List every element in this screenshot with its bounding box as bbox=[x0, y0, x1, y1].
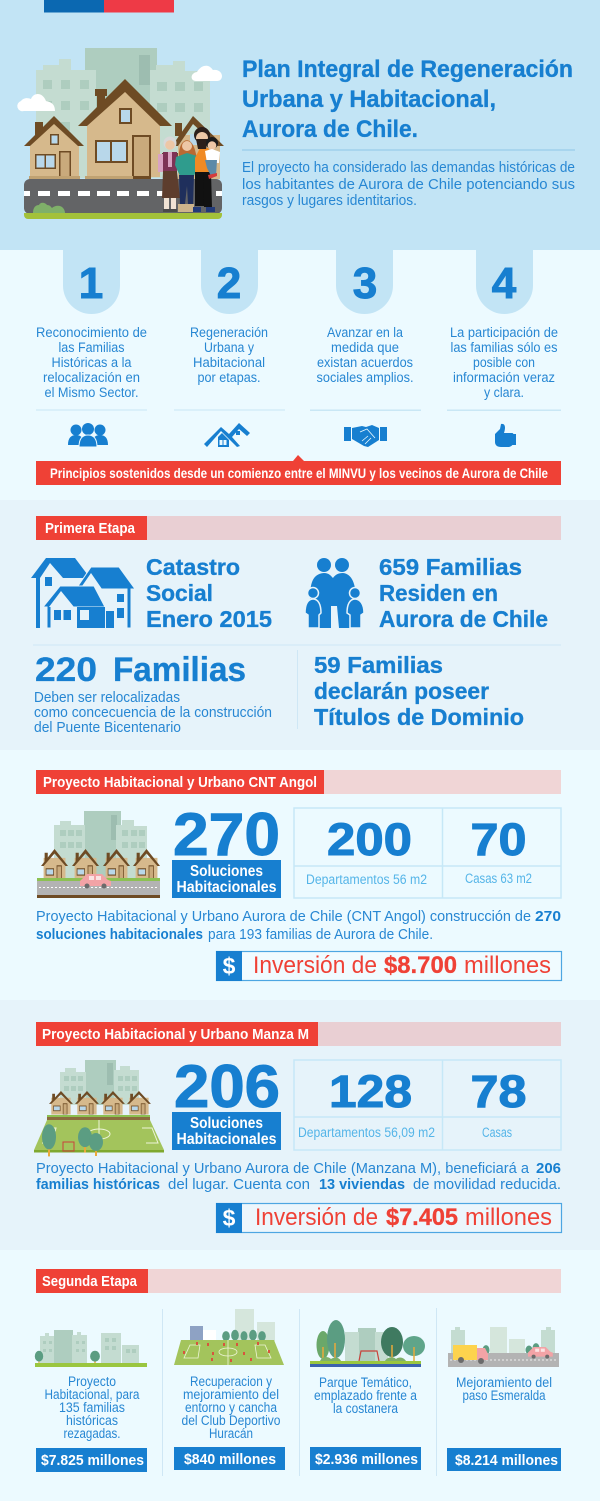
stat: 59 families bbox=[314, 652, 524, 730]
text 4: La participación de bbox=[450, 325, 558, 340]
table: Manza M breakdown: Departamentos 56,09 m2 bbox=[298, 1125, 435, 1140]
illustration: park bbox=[310, 1320, 425, 1367]
table: Manza M breakdown: Casas bbox=[482, 1125, 512, 1140]
illustration: Manza M houses and field bbox=[34, 1060, 164, 1156]
text: CNT Angol description bbox=[36, 909, 561, 943]
text 1: Reconocimiento de bbox=[36, 325, 147, 340]
panel: theme park bbox=[310, 1320, 425, 1470]
text: families residing: Residen en bbox=[379, 580, 498, 606]
text: Proyecto bbox=[68, 1374, 116, 1389]
illustration: neighbourhood with family bbox=[17, 48, 224, 219]
text 1: el Mismo Sector. bbox=[44, 385, 138, 400]
text: families residing: 659 Familias bbox=[379, 554, 522, 580]
text: census: Social bbox=[146, 580, 213, 606]
stat: 206 solutions bbox=[172, 1053, 281, 1150]
heading: Primera Etapa bbox=[36, 516, 561, 540]
text: Parque Temático, bbox=[319, 1375, 412, 1390]
text bbox=[314, 1375, 417, 1416]
text bbox=[44, 1374, 140, 1441]
text 1 bbox=[36, 325, 147, 400]
illustration: CNT Angol houses bbox=[37, 811, 160, 898]
heading: Manza M bbox=[36, 1022, 561, 1046]
heading: Segunda Etapa bbox=[36, 1269, 561, 1293]
panel: Esmeralda passage bbox=[447, 1327, 561, 1471]
text: CNT Angol description: para 193 familias de Aurora de Chile. bbox=[208, 927, 433, 943]
number tab 4 bbox=[476, 250, 533, 314]
text: Manza M description: 206 bbox=[536, 1161, 561, 1177]
stat: 206 solutions: Habitacionales bbox=[176, 1131, 276, 1148]
heading: CNT Angol: Proyecto Habitacional y Urbano CNT Angol bbox=[43, 774, 317, 791]
section: first stage background bbox=[0, 500, 600, 750]
callout: investment 7.405: Inversión de bbox=[255, 1204, 378, 1231]
number tab 1 bbox=[63, 250, 120, 314]
price bbox=[174, 1447, 285, 1470]
icon: houses census bbox=[31, 558, 135, 628]
section: Manza M background bbox=[0, 1000, 600, 1250]
text 3: sociales amplios. bbox=[316, 370, 414, 385]
title: Plan Integral de Regeneración bbox=[242, 56, 573, 83]
intro divider bbox=[242, 150, 575, 151]
section: CNT Angol background bbox=[0, 750, 600, 1000]
stat: 220 families: Familias bbox=[113, 651, 246, 689]
text: Manza M description: 13 viviendas bbox=[319, 1177, 405, 1193]
price: $2.936 millones bbox=[315, 1451, 418, 1468]
table: Manza M breakdown: 128 bbox=[329, 1066, 412, 1117]
heading: Manza M: Proyecto Habitacional y Urbano Manza M bbox=[42, 1026, 309, 1043]
icon: houses bbox=[204, 423, 250, 447]
text: Huracán bbox=[209, 1426, 253, 1441]
text: census: Catastro bbox=[146, 554, 240, 580]
heading: Primera Etapa: Primera Etapa bbox=[45, 520, 136, 537]
text: CNT Angol description: Proyecto Habitacional y Urbano Aurora de Chile (CNT Angol) construcción de bbox=[36, 909, 531, 925]
number tab 1: 1 bbox=[79, 259, 103, 308]
text: paso Esmeralda bbox=[462, 1388, 546, 1403]
price: $7.825 millones bbox=[41, 1452, 144, 1469]
family bbox=[158, 127, 220, 212]
text: CNT Angol description: soluciones habitacionales bbox=[36, 927, 203, 943]
flag stripe bbox=[44, 0, 174, 12]
intro text: El proyecto ha considerado las demandas históricas de bbox=[242, 160, 575, 176]
text 4: y clara. bbox=[484, 385, 524, 400]
price: $840 millones bbox=[184, 1451, 276, 1468]
illustration: football pitch bbox=[174, 1309, 284, 1365]
stat: 270 solutions: Habitacionales bbox=[176, 879, 276, 896]
principle 3 bbox=[310, 250, 421, 447]
text: rezagadas. bbox=[64, 1426, 120, 1441]
stat: 59 families: 59 Familias bbox=[314, 652, 443, 678]
price: $8.214 millones bbox=[455, 1452, 558, 1469]
table: CNT Angol breakdown: 70 bbox=[470, 814, 526, 865]
text 3: medida que bbox=[331, 340, 399, 355]
child bbox=[205, 137, 220, 179]
text 4: posible con bbox=[473, 355, 535, 370]
text: históricas bbox=[66, 1413, 118, 1428]
panel: housing project bbox=[35, 1330, 147, 1472]
text 4 bbox=[450, 325, 558, 400]
heading: Segunda Etapa: Segunda Etapa bbox=[42, 1273, 138, 1290]
table: CNT Angol breakdown: Casas 63 m2 bbox=[465, 871, 532, 886]
callout: investment 8.700: $ bbox=[223, 953, 236, 979]
text 3: existan acuerdos bbox=[317, 355, 413, 370]
illustration: buildings bbox=[35, 1330, 147, 1367]
callout: principles banner bbox=[36, 455, 561, 485]
table: Manza M breakdown bbox=[294, 1060, 561, 1150]
table: CNT Angol breakdown: 200 bbox=[327, 814, 412, 865]
text 2: Habitacional bbox=[193, 355, 265, 370]
table: CNT Angol breakdown bbox=[294, 808, 561, 898]
intro text bbox=[242, 160, 575, 209]
text: census: Enero 2015 bbox=[146, 606, 272, 632]
big house bbox=[78, 79, 172, 179]
text: families residing bbox=[379, 554, 548, 632]
stat: 220 families: 220 bbox=[35, 651, 97, 689]
price bbox=[36, 1448, 147, 1472]
text: Manza M description: de movilidad reducida. bbox=[413, 1177, 561, 1193]
clouds bbox=[17, 66, 222, 111]
text: Recuperacion y bbox=[190, 1374, 272, 1389]
stat: 220 families bbox=[34, 651, 272, 736]
principle 4 bbox=[447, 250, 561, 447]
stat: 270 solutions: 270 bbox=[173, 801, 280, 868]
text: Habitacional, para bbox=[44, 1387, 140, 1402]
text 4: información veraz bbox=[453, 370, 555, 385]
section: second stage background bbox=[0, 1250, 600, 1501]
intro text: rasgos y lugares identitarios. bbox=[242, 193, 417, 209]
callout: investment 7.405 bbox=[216, 1203, 562, 1233]
text: mejoramiento del bbox=[183, 1387, 279, 1402]
stat: 270 solutions: Soluciones bbox=[190, 863, 263, 880]
intro text: los habitantes de Aurora de Chile potenciando sus bbox=[242, 177, 575, 193]
text: entorno y cancha bbox=[185, 1400, 277, 1415]
text 2: Regeneración bbox=[190, 325, 268, 340]
buildings bbox=[36, 48, 210, 178]
text 1: las Familias bbox=[58, 340, 125, 355]
text: Manza M description: familias históricas bbox=[36, 1177, 160, 1193]
heading: CNT Angol bbox=[36, 770, 561, 794]
text: emplazado frente a bbox=[314, 1388, 417, 1403]
left house bbox=[24, 116, 84, 179]
principle 1 bbox=[36, 250, 147, 447]
text: la costanera bbox=[333, 1401, 398, 1416]
stat: 220 families: Deben ser relocalizadas bbox=[34, 690, 180, 706]
text 2: por etapas. bbox=[198, 370, 260, 385]
stat: 220 families: del Puente Bicentenario bbox=[34, 720, 181, 736]
price bbox=[310, 1447, 421, 1470]
text: families residing: Aurora de Chile bbox=[379, 606, 548, 632]
stat: 206 solutions: Soluciones bbox=[190, 1115, 263, 1132]
section: header background bbox=[0, 0, 600, 250]
grandmother bbox=[158, 136, 180, 212]
text 3: Avanzar en la bbox=[327, 325, 403, 340]
stat: 270 solutions bbox=[172, 801, 281, 898]
text: CNT Angol description: 270 bbox=[535, 909, 561, 925]
text 1: relocalización en bbox=[43, 370, 140, 385]
callout: investment 8.700: Inversión de bbox=[253, 952, 377, 979]
back right house bbox=[172, 116, 224, 179]
text 3 bbox=[316, 325, 414, 385]
table: CNT Angol breakdown: Departamentos 56 m2 bbox=[306, 872, 427, 887]
stat: 59 families: declarán poseer bbox=[314, 678, 489, 704]
text: census bbox=[146, 554, 272, 632]
text 1: Históricas a la bbox=[52, 355, 132, 370]
icon: thumbs up bbox=[495, 424, 516, 447]
father bbox=[193, 127, 216, 212]
panel: sports club bbox=[174, 1309, 285, 1470]
text bbox=[182, 1374, 280, 1441]
text 2: Urbana y bbox=[204, 340, 254, 355]
callout: investment 8.700: millones bbox=[464, 952, 551, 979]
title: Aurora de Chile. bbox=[242, 116, 418, 143]
text bbox=[456, 1375, 552, 1403]
number tab 2 bbox=[201, 250, 258, 314]
principle 2 bbox=[174, 250, 285, 447]
text: Mejoramiento del bbox=[456, 1375, 552, 1390]
text: del Club Deportivo bbox=[182, 1413, 280, 1428]
road bbox=[24, 179, 222, 219]
icon: people bbox=[68, 423, 108, 447]
number tab 3 bbox=[336, 250, 393, 314]
callout: investment 8.700: $8.700 bbox=[384, 952, 457, 979]
stat: 220 families: como concecuencia de la construcción bbox=[34, 705, 272, 721]
callout: investment 7.405: $7.405 bbox=[386, 1204, 458, 1231]
section: principles background bbox=[0, 250, 600, 500]
stat: 59 families: Títulos de Dominio bbox=[314, 704, 524, 730]
text: 135 familias bbox=[59, 1400, 125, 1415]
icon: handshake bbox=[344, 425, 387, 447]
text 2 bbox=[190, 325, 268, 385]
table: Manza M breakdown: 78 bbox=[470, 1066, 526, 1117]
woman bbox=[175, 140, 198, 212]
number tab 4: 4 bbox=[492, 259, 517, 308]
callout: investment 7.405: $ bbox=[223, 1205, 236, 1231]
price bbox=[447, 1448, 561, 1471]
stat: 206 solutions: 206 bbox=[174, 1053, 280, 1120]
number tab 2: 2 bbox=[217, 259, 241, 308]
callout: investment 7.405: millones bbox=[465, 1204, 552, 1231]
text: Manza M description bbox=[36, 1161, 561, 1193]
icon: family bbox=[305, 558, 364, 628]
title: Urbana y Habitacional, bbox=[242, 86, 496, 113]
number tab 3: 3 bbox=[353, 259, 377, 308]
text: Manza M description: del lugar. Cuenta con bbox=[168, 1177, 310, 1193]
title bbox=[242, 56, 573, 143]
text 4: las familias sólo es bbox=[450, 340, 558, 355]
illustration: road with truck bbox=[448, 1327, 559, 1367]
callout: investment 8.700 bbox=[216, 951, 562, 981]
text: Manza M description: Proyecto Habitacional y Urbano Aurora de Chile (Manzana M), beneficiará a bbox=[36, 1161, 530, 1177]
